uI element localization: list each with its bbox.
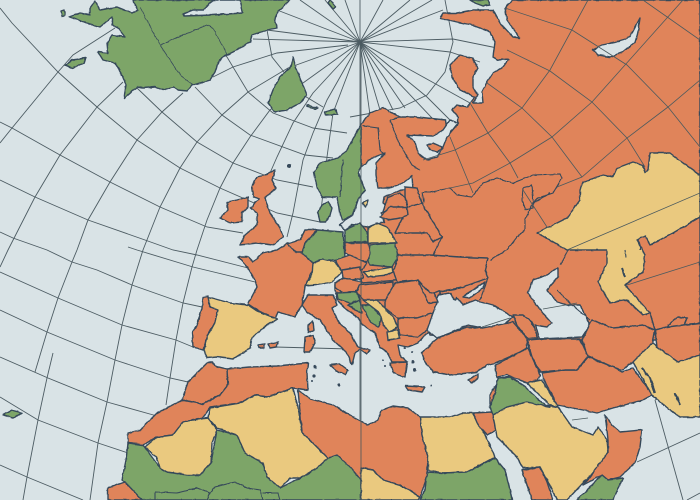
greenland inland fjord — [183, 0, 243, 16]
morocco — [182, 362, 228, 404]
slovenia green — [337, 292, 360, 303]
georgia — [513, 315, 538, 338]
balkans and central europe base — [335, 280, 440, 362]
chad yellow — [361, 468, 420, 500]
poland west — [345, 223, 368, 243]
peloponnese — [390, 362, 407, 377]
west africa orange — [108, 482, 142, 500]
croatia green — [348, 300, 362, 313]
turkey — [422, 322, 527, 375]
scandinavia — [314, 124, 365, 220]
libya — [298, 390, 428, 497]
lithuania — [380, 207, 408, 220]
afghan yellow — [633, 343, 700, 417]
north africa orange band — [128, 363, 308, 445]
eurasia mainland — [361, 0, 700, 340]
sardinia — [304, 335, 315, 352]
moldova — [418, 278, 438, 303]
baikal — [593, 18, 640, 57]
kazakhstan region — [537, 153, 700, 315]
hungary sized yellow state — [363, 267, 393, 277]
inland borders and lake marks — [155, 117, 680, 500]
east africa green — [420, 458, 512, 500]
yemen orange — [522, 467, 553, 500]
lake in white sea area — [427, 143, 442, 152]
oman — [583, 415, 642, 485]
ukraine — [393, 255, 488, 293]
switzerland sized yellow state — [305, 259, 342, 286]
sahel green — [122, 430, 361, 500]
sicily — [330, 364, 348, 375]
baltic sea — [340, 153, 413, 230]
greenland inland borders — [140, 7, 227, 85]
baltic yellow state — [368, 223, 397, 243]
crete — [405, 386, 425, 392]
portugal — [192, 296, 218, 350]
great britain — [240, 170, 283, 245]
spain — [204, 297, 277, 359]
ireland — [220, 197, 248, 223]
bosnia green — [362, 305, 382, 327]
germany — [302, 230, 345, 263]
graticule over land — [361, 0, 700, 500]
white sea — [407, 120, 458, 160]
arabia south green — [577, 475, 623, 500]
west yellow state — [145, 418, 217, 475]
orange block — [335, 278, 362, 295]
macedonia yellow — [387, 330, 400, 340]
arabia — [493, 402, 608, 500]
balearic east — [268, 342, 278, 348]
austria block — [342, 267, 363, 280]
jordan green — [490, 377, 550, 415]
romania — [385, 280, 437, 318]
central asia region — [625, 217, 700, 330]
algeria yellow — [208, 388, 328, 488]
gotland — [362, 200, 368, 207]
orange balkan state — [357, 282, 393, 300]
sea of azov — [463, 282, 485, 298]
france — [238, 243, 315, 319]
black sea — [427, 293, 513, 338]
belarus — [395, 203, 442, 242]
iran — [542, 357, 652, 413]
bulgaria — [398, 313, 433, 337]
estonia — [405, 187, 422, 207]
small dark islands — [287, 164, 432, 387]
caucasus south — [527, 339, 588, 372]
corsica — [308, 321, 314, 333]
denmark — [318, 202, 332, 222]
levant strip — [490, 385, 496, 407]
syria — [495, 348, 540, 383]
greenland and arctic islands — [3, 0, 490, 418]
central orange state — [345, 243, 370, 262]
cyprus — [468, 374, 478, 383]
italy — [302, 295, 370, 365]
serbia yellow — [363, 300, 398, 332]
aral lake — [668, 317, 687, 330]
latvia — [383, 193, 408, 212]
sinai — [473, 412, 496, 435]
ukraine west green — [368, 243, 398, 267]
iraq yellow — [527, 380, 558, 407]
egypt — [420, 413, 495, 473]
turkmen region — [582, 320, 655, 370]
benelux — [287, 230, 317, 252]
caspian sea — [528, 268, 590, 339]
pakistan region — [655, 323, 700, 362]
central orange state south — [335, 255, 367, 272]
balearic — [258, 344, 265, 348]
